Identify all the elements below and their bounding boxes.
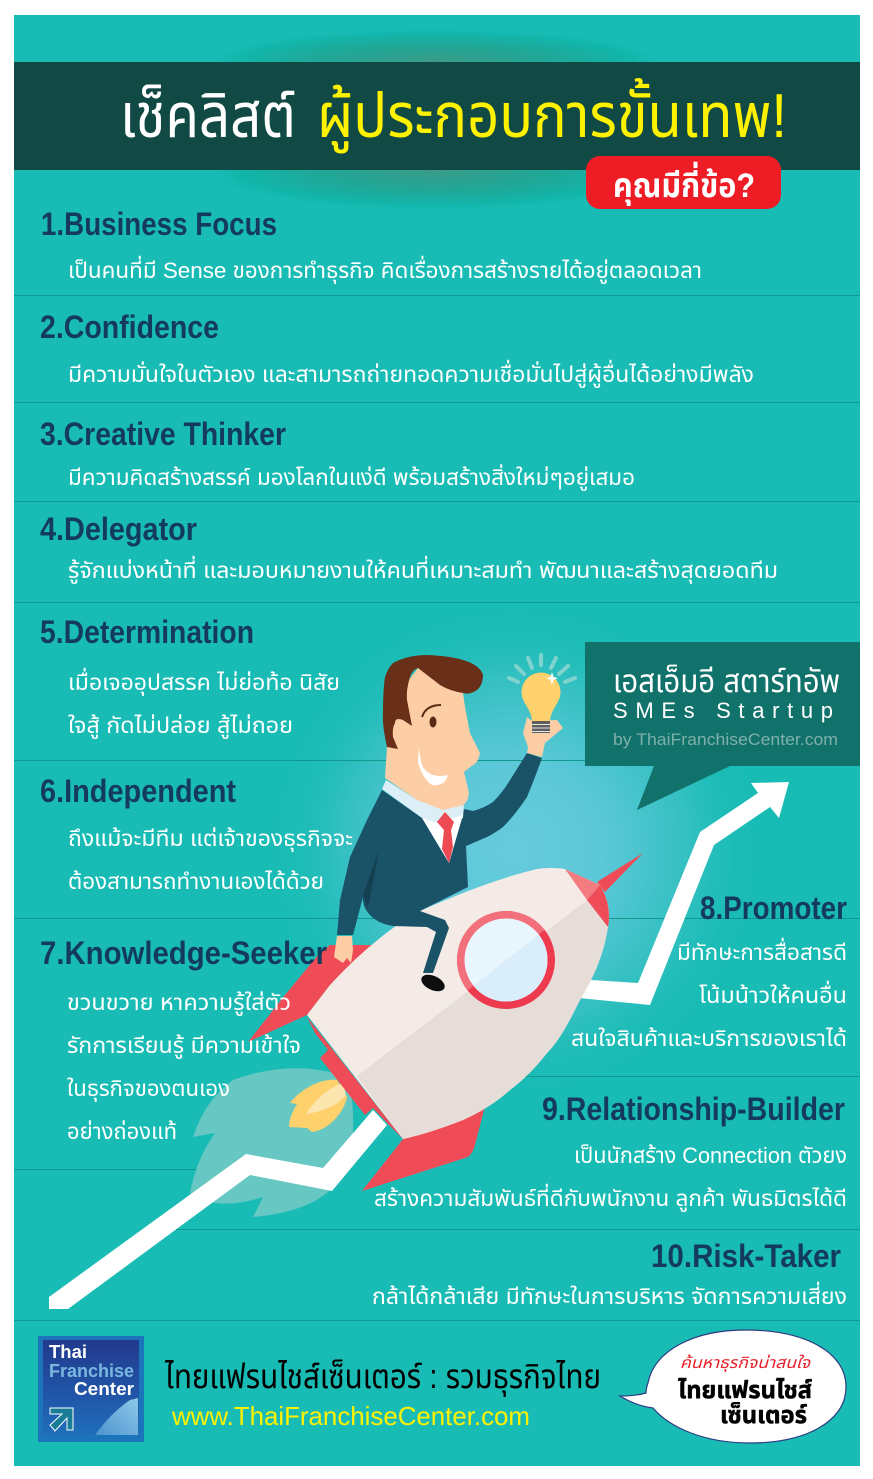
businessman tie xyxy=(437,812,454,863)
rocket nose xyxy=(565,869,609,927)
item 3: มีความคิดสร้างสรรค์ มองโลกในแง่ดี พร้อมสร้างสิ่งใหม่ๆอยู่เสมอ xyxy=(68,463,635,491)
speech panel: SMEs Startup xyxy=(585,642,860,810)
speech bubble: ค้นหาธุรกิจน่าสนใจ xyxy=(680,1354,811,1373)
item 8: มีทักษะการสื่อสารดี xyxy=(677,937,847,965)
light bulb xyxy=(509,655,575,733)
item 6: ต้องสามารถทำงานเองได้ด้วย xyxy=(68,869,324,894)
item 9 xyxy=(374,1091,847,1212)
item 4: 4.Delegator xyxy=(40,511,197,547)
businessman suit xyxy=(337,753,542,973)
item 8: สนใจสินค้าและบริการของเราได้ xyxy=(571,1026,847,1051)
item 4: รู้จักแบ่งหน้าที่ และมอบหมายงานให้คนที่เหมาะสมทำ พัฒนาและสร้างสุดยอดทีม xyxy=(68,555,778,584)
businessman shoe xyxy=(419,971,447,995)
rocket exhaust cloud xyxy=(190,1068,354,1217)
item 10: กล้าได้กล้าเสีย มีทักษะในการบริหาร จัดการความเสี่ยง xyxy=(372,1281,847,1309)
businessman hand on rocket xyxy=(334,936,353,963)
title band xyxy=(14,62,860,170)
item 7: อย่างถ่องแท้ xyxy=(67,1119,177,1144)
item 5: 5.Determination xyxy=(40,614,254,650)
item 1 xyxy=(41,206,702,284)
logo: Thai Franchise Center: Thai xyxy=(49,1342,87,1362)
businessman collar xyxy=(382,780,464,825)
item 9: 9.Relationship-Builder xyxy=(542,1091,845,1127)
item 10: 10.Risk-Taker xyxy=(651,1238,841,1274)
rocket body xyxy=(307,868,609,1139)
item 9: สร้างความสัมพันธ์ที่ดีกับพนักงาน ลูกค้า พันธมิตรได้ดี xyxy=(374,1183,847,1212)
item 6: 6.Independent xyxy=(40,773,236,809)
businessman eye xyxy=(422,705,441,728)
item 8 xyxy=(571,890,847,1051)
item 4 xyxy=(40,511,778,584)
flame xyxy=(289,1080,347,1132)
item 8: โน้มน้าวให้คนอื่น xyxy=(699,980,847,1008)
businessman hair xyxy=(383,655,483,749)
title band: เช็คลิสต์ xyxy=(120,82,296,151)
item 5: ใจสู้ กัดไม่ปล่อย สู้ไม่ถอย xyxy=(68,713,293,739)
logo: Thai Franchise Center: Center xyxy=(74,1379,134,1399)
item 5 xyxy=(40,614,340,739)
lower growth arrow xyxy=(49,1110,387,1309)
footer heading: ไทยแฟรนไชส์เซ็นเตอร์ : รวมธุรกิจไทย xyxy=(164,1358,601,1397)
rocket shaded side xyxy=(357,885,609,1139)
item 8: 8.Promoter xyxy=(700,890,847,926)
footer url: www.ThaiFranchiseCenter.com xyxy=(171,1401,530,1431)
logo: Thai Franchise Center: Franchise xyxy=(49,1361,134,1381)
item 7: ขวนขวาย หาความรู้ใส่ตัว xyxy=(67,990,291,1016)
businessman raised hand xyxy=(523,717,563,757)
badge: how many xyxy=(586,156,781,209)
rocket with businessman xyxy=(49,655,643,1309)
rocket window xyxy=(457,911,555,1009)
item 7: ในธุรกิจของตนเอง xyxy=(67,1076,230,1102)
item 2 xyxy=(40,309,754,388)
item 10 xyxy=(372,1238,847,1309)
upper growth arrow xyxy=(579,782,789,1005)
speech panel: SMEs Startup: by ThaiFranchiseCenter.com xyxy=(613,730,838,749)
header shadow xyxy=(200,28,670,212)
speech bubble: ไทยแฟรนไชส์ xyxy=(678,1377,812,1404)
badge: how many: คุณมีกี่ข้อ? xyxy=(613,161,755,206)
item 7 xyxy=(40,935,327,1144)
speech bubble: เซ็นเตอร์ xyxy=(720,1402,807,1429)
businessman face xyxy=(383,668,480,810)
item 2: 2.Confidence xyxy=(40,309,219,345)
businessman smile xyxy=(418,747,448,785)
item 7: 7.Knowledge-Seeker xyxy=(40,935,327,971)
item 7: รักการเรียนรู้ มีความเข้าใจ xyxy=(67,1033,301,1059)
title band: ผู้ประกอบการขั้นเทพ! xyxy=(317,78,787,154)
item 2: มีความมั่นใจในตัวเอง และสามารถถ่ายทอดความเชื่อมั่นไปสู่ผู้อื่นได้อย่างมีพลัง xyxy=(68,359,754,388)
item 9: เป็นนักสร้าง Connection ตัวยง xyxy=(574,1143,847,1168)
rocket fins xyxy=(248,853,643,1191)
item 6 xyxy=(40,773,353,894)
item 1: 1.Business Focus xyxy=(41,206,277,242)
logo: Thai Franchise Center xyxy=(38,1336,144,1442)
speech bubble xyxy=(620,1330,846,1443)
item 5: เมื่อเจออุปสรรค ไม่ย่อท้อ นิสัย xyxy=(68,667,340,696)
speech panel: SMEs Startup: เอสเอ็มอี สตาร์ทอัพ xyxy=(613,663,840,699)
item 3 xyxy=(40,416,635,491)
item 3: 3.Creative Thinker xyxy=(40,416,286,452)
item 1: เป็นคนที่มี Sense ของการทำธุรกิจ คิดเรื่องการสร้างรายได้อยู่ตลอดเวลา xyxy=(68,255,702,284)
businessman shirt xyxy=(422,815,463,863)
central glow xyxy=(270,605,760,1095)
speech panel: SMEs Startup: SMEs Startup xyxy=(613,698,838,723)
item 6: ถึงแม้จะมีทีม แต่เจ้าของธุรกิจจะ xyxy=(68,826,353,852)
arm shadow xyxy=(363,850,379,908)
